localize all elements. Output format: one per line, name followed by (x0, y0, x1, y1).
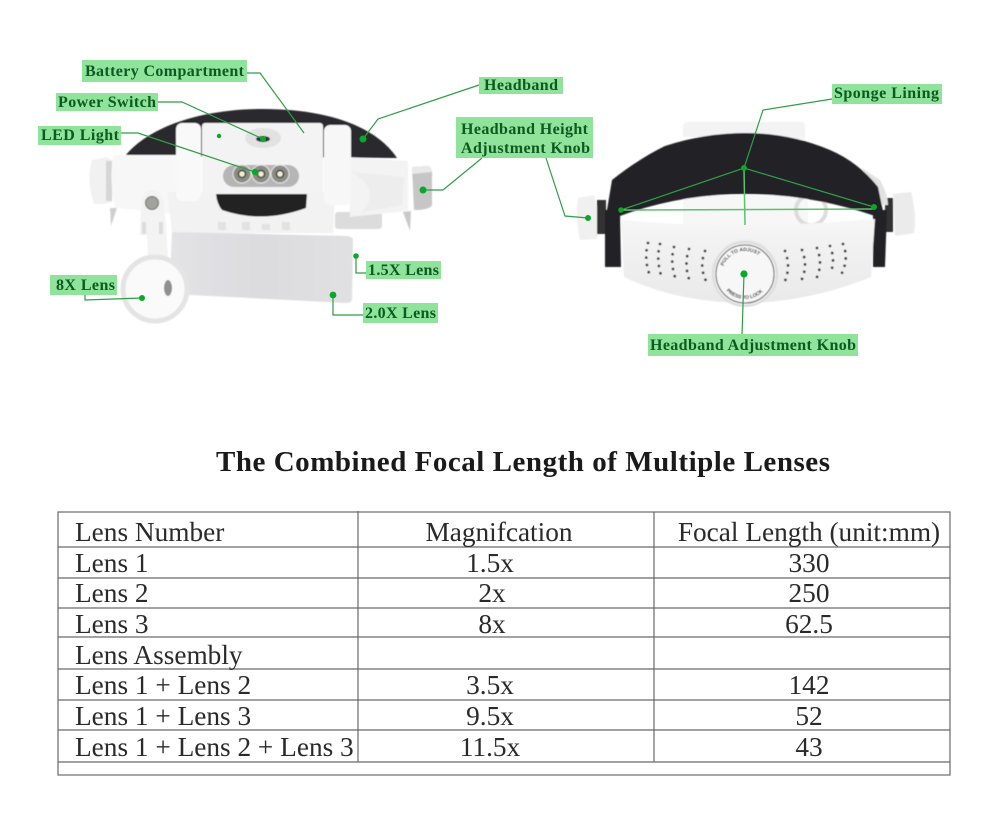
label: Battery Compartment: Battery Compartment (85, 63, 245, 80)
arm slots (142, 222, 163, 234)
adjustment dial (713, 242, 777, 306)
label: Power Switch: Power Switch (58, 94, 156, 111)
black sponge band sides (605, 210, 887, 267)
label: LED Light: LED Light (41, 127, 120, 144)
power switch (245, 128, 281, 148)
dial grip bump (726, 240, 766, 256)
back grey strip (335, 212, 382, 229)
column: focal length: 142 (789, 670, 829, 700)
left knob collar (106, 161, 112, 201)
column: lens number: Lens 2 (75, 578, 149, 608)
left wing housing (111, 155, 190, 214)
band end highlight right (862, 168, 888, 205)
ring behind the band (796, 195, 826, 225)
label: Headband Height Adjustment Knob: Adjustment Knob (461, 140, 590, 157)
lens reflection (164, 280, 172, 296)
label: 8X Lens: 8X Lens (56, 277, 115, 294)
see-through panel (683, 195, 808, 235)
mount ticks (218, 222, 290, 230)
right device: rear view of the headband (577, 122, 915, 308)
white front band (621, 219, 875, 303)
column: lens number: Lens Assembly (75, 640, 243, 670)
title: The Combined Focal Length of Multiple Lenses (216, 446, 830, 478)
column: magnification (425, 517, 573, 762)
label: 2.0X Lens: 2.0X Lens (365, 305, 436, 322)
left vent holes (646, 243, 706, 281)
LED panel (223, 165, 299, 187)
lens box (170, 232, 353, 303)
left column (176, 123, 201, 201)
right knob (893, 192, 915, 236)
green marker dots (139, 134, 877, 301)
column: lens number (75, 517, 354, 762)
right vent holes (785, 244, 846, 281)
left wing foot (110, 208, 117, 226)
column: magnification: Magnifcation (425, 517, 573, 547)
column: magnification: 3.5x (466, 670, 514, 700)
dial text top: PULL TO ADJUST (720, 247, 761, 266)
LED left (233, 165, 251, 183)
black crescent (216, 194, 307, 217)
8X round lens (123, 257, 187, 321)
column: focal length: Focal Length (unit:mm) (678, 517, 940, 547)
label: 1.5X Lens: 1.5X Lens (368, 262, 439, 279)
column: magnification: 9.5x (466, 701, 514, 731)
column: magnification: 8x (478, 609, 506, 639)
column: lens number: Lens 1 + Lens 2 (75, 670, 251, 700)
black headband arc (125, 109, 397, 158)
column: magnification: 1.5x (466, 548, 514, 578)
lower mount (168, 192, 335, 233)
column: focal length: 43 (795, 732, 823, 762)
LED middle (252, 165, 270, 183)
rear white support (683, 122, 805, 140)
right wing foot (403, 211, 411, 231)
focal length table (58, 511, 950, 775)
power switch button (256, 136, 270, 142)
right knob (412, 166, 432, 210)
label: Headband Height Adjustment Knob: Headband Height (461, 121, 589, 138)
table grid (58, 511, 950, 775)
column: focal length: 330 (789, 548, 829, 578)
LED right (271, 165, 289, 183)
dial text bottom: PRESS TO LOCK (726, 288, 764, 300)
lens arm (140, 190, 168, 262)
column: focal length: 52 (795, 701, 823, 731)
column: lens number: Lens 1 + Lens 3 (75, 701, 251, 731)
column: magnification: 2x (478, 578, 506, 608)
right knob cap (412, 166, 432, 174)
LED cores (238, 170, 284, 178)
dial inner face (716, 245, 774, 303)
arm screw (146, 196, 158, 210)
left knob collar (597, 200, 606, 234)
label: Sponge Lining: Sponge Lining (834, 85, 939, 102)
label: Headband Height Adjustment Knob (456, 117, 593, 158)
battery compartment panel (202, 123, 323, 194)
leader lines (85, 73, 874, 335)
column: lens number: Lens 1 + Lens 2 + Lens 3 (75, 732, 354, 762)
left device: front view of the magnifier (89, 109, 432, 321)
right wing shadow (352, 172, 404, 212)
column: lens number: Lens 3 (75, 609, 149, 639)
column: focal length: 250 (789, 578, 829, 608)
left knob (89, 157, 112, 204)
column: lens number: Lens 1 (75, 548, 149, 578)
right wing housing (348, 157, 408, 217)
label: Headband: Headband (484, 77, 558, 94)
column: focal length: 62.5 (785, 609, 833, 639)
left knob (577, 195, 598, 240)
column: magnification: 11.5x (460, 732, 521, 762)
label: Headband Adjustment Knob: Headband Adjustment Knob (650, 337, 856, 354)
black sponge band arch (606, 133, 884, 216)
column: lens number: Lens Number (75, 517, 224, 547)
column: focal length (678, 517, 940, 762)
right column (324, 125, 351, 205)
right knob collar (885, 198, 893, 232)
